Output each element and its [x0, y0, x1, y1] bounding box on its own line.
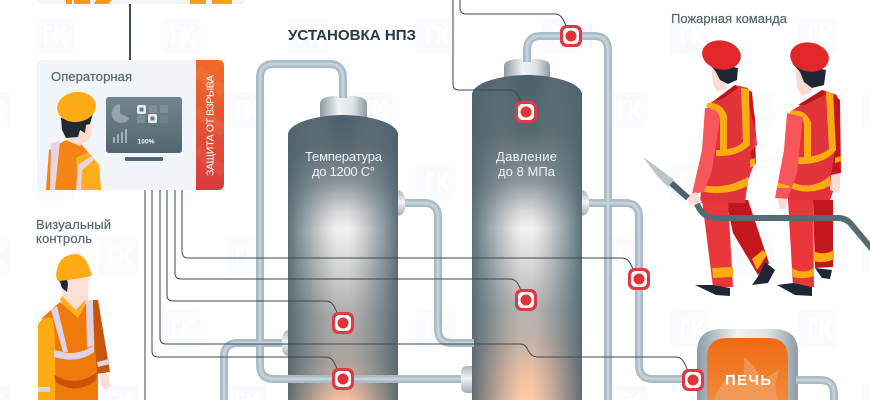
monitor — [106, 97, 182, 161]
label: pressure: Давление — [496, 149, 557, 164]
tank: pressure — [472, 75, 582, 400]
label: operator room: Операторная — [51, 69, 132, 84]
explosion protection strip: ЗАЩИТА ОТ ВЗРЫВА — [204, 75, 216, 176]
explosion protection strip — [196, 60, 224, 190]
tank: temperature — [288, 115, 398, 400]
pipework — [224, 36, 834, 400]
hose nozzle — [643, 157, 674, 187]
monitor: 100% — [138, 138, 155, 146]
furnace — [697, 329, 798, 400]
tank: pressure: до 8 МПа — [498, 164, 556, 179]
top control cards — [37, 0, 245, 4]
pie chart — [112, 104, 130, 123]
tank caps — [320, 59, 550, 118]
sensors — [332, 25, 704, 391]
operator figure — [46, 89, 101, 190]
signal bars — [113, 129, 127, 143]
connector: top card to operator room — [129, 4, 131, 60]
label: visual inspection: Визуальный — [36, 217, 111, 232]
heading: refinery unit: УСТАНОВКА НПЗ — [288, 27, 416, 44]
signal wiring — [145, 0, 693, 400]
label: visual inspection: контроль — [36, 231, 92, 246]
worker: visual inspection — [38, 254, 110, 400]
label: fire team: Пожарная команда — [671, 11, 788, 26]
fire hose — [643, 157, 870, 249]
firefighter 1 — [687, 37, 775, 296]
tank: temperature: до 1200 С° — [312, 164, 375, 179]
status squares — [137, 105, 168, 123]
firefighter 2 — [775, 39, 841, 296]
label: temperature: Температура — [305, 149, 383, 164]
furnace: ПЕЧЬ — [725, 372, 771, 389]
flames — [714, 357, 780, 400]
panel: operator room — [37, 60, 224, 190]
pipe flanges — [282, 190, 589, 393]
